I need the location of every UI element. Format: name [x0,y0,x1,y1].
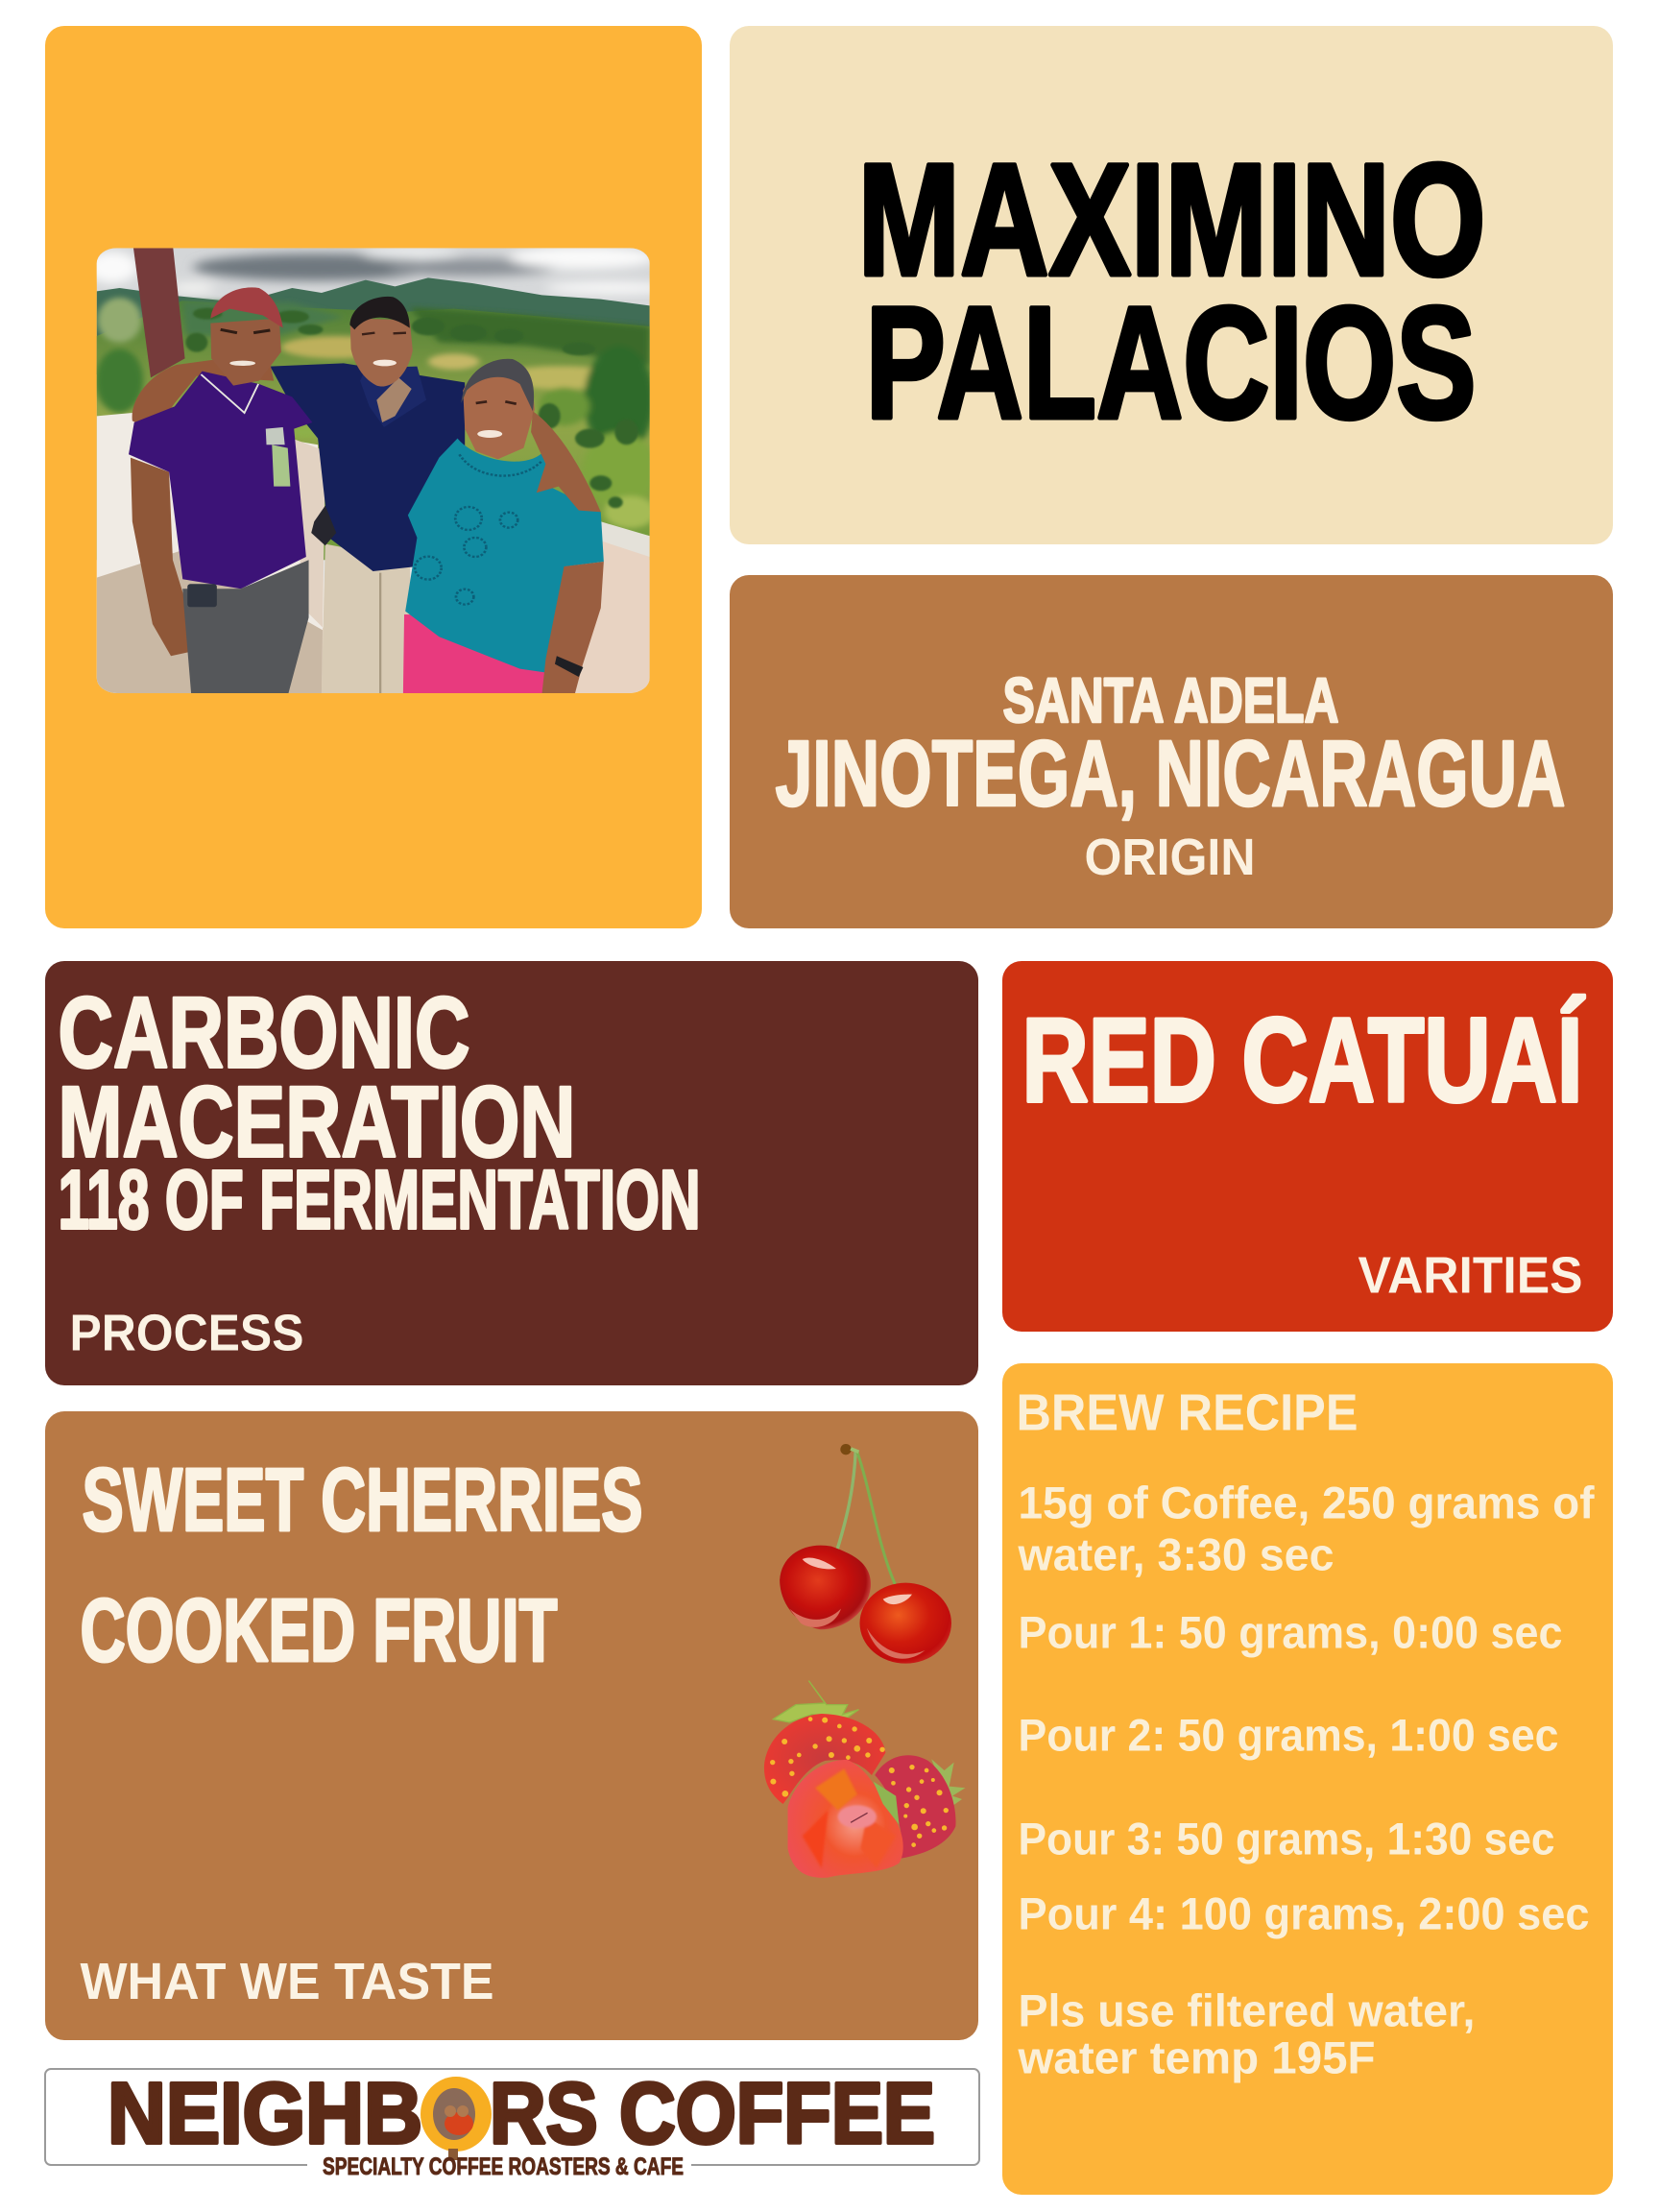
varieties label: VARITIES [1358,1246,1582,1304]
tasting notes text: SWEET CHERRIES [83,1450,643,1550]
logo badge [421,2077,492,2160]
terrace wall right [575,534,650,693]
illustration: cherries [780,1444,951,1664]
recipe steps: water temp 195F [1017,2032,1375,2083]
recipe steps: Pls use filtered water, [1018,1985,1475,2035]
tasting notes text: COOKED FRUIT [81,1580,557,1680]
terrace wall left [97,413,329,693]
photo: three farmers on a terrace [86,247,670,693]
recipe steps: Pour 4: 100 grams, 2:00 sec [1018,1887,1590,1939]
heading: MAXIMINO PALACIOS: MAXIMINO [858,132,1486,309]
heading: MAXIMINO PALACIOS: PALACIOS [866,275,1477,452]
panel: brew recipe [1002,1363,1613,2195]
panel: photo card [45,26,702,928]
process text: MACERATION [58,1066,576,1179]
origin location text: SANTA ADELA [1002,664,1338,735]
middle man's arm over left man [132,360,275,422]
recipe steps: Pour 3: 50 grams, 1:30 sec [1018,1813,1555,1864]
process text: 118 OF FERMENTATION [58,1154,701,1246]
panel: origin [730,575,1613,928]
illustration: strawberries [764,1681,965,1878]
panel: varieties [1002,961,1613,1332]
process text [58,977,701,1246]
recipe steps: Pour 1: 50 grams, 0:00 sec [1018,1607,1563,1657]
logo tagline: SPECIALTY COFFEE ROASTERS & CAFE [323,2153,684,2180]
recipe steps [1017,1477,1595,2083]
panel: farmer name [730,26,1613,544]
recipe steps: water, 3:30 sec [1018,1528,1334,1580]
middle man [322,544,414,693]
tasting label: WHAT WE TASTE [81,1953,493,2010]
pillar [133,248,185,377]
panel: tasting notes [45,1411,978,2040]
recipe steps: 15g of Coffee, 250 grams of [1018,1477,1595,1528]
left man [131,457,188,657]
recipe heading: BREW RECIPE [1016,1384,1358,1442]
origin label: ORIGIN [1085,829,1256,886]
panel: process [45,961,978,1385]
process text: CARBONIC [58,977,470,1089]
recipe steps: Pour 2: 50 grams, 1:00 sec [1018,1709,1559,1761]
heading: MAXIMINO PALACIOS [858,132,1486,452]
woman [403,614,544,693]
logo wordmark [108,2066,935,2162]
process label: PROCESS [69,1304,303,1361]
logo wordmark: NEIGHB [108,2066,422,2162]
tasting notes text [81,1450,643,1680]
origin location text [776,664,1565,826]
logo: Neighbors Coffee [45,2066,979,2180]
logo wordmark: RS COFFEE [490,2066,935,2162]
